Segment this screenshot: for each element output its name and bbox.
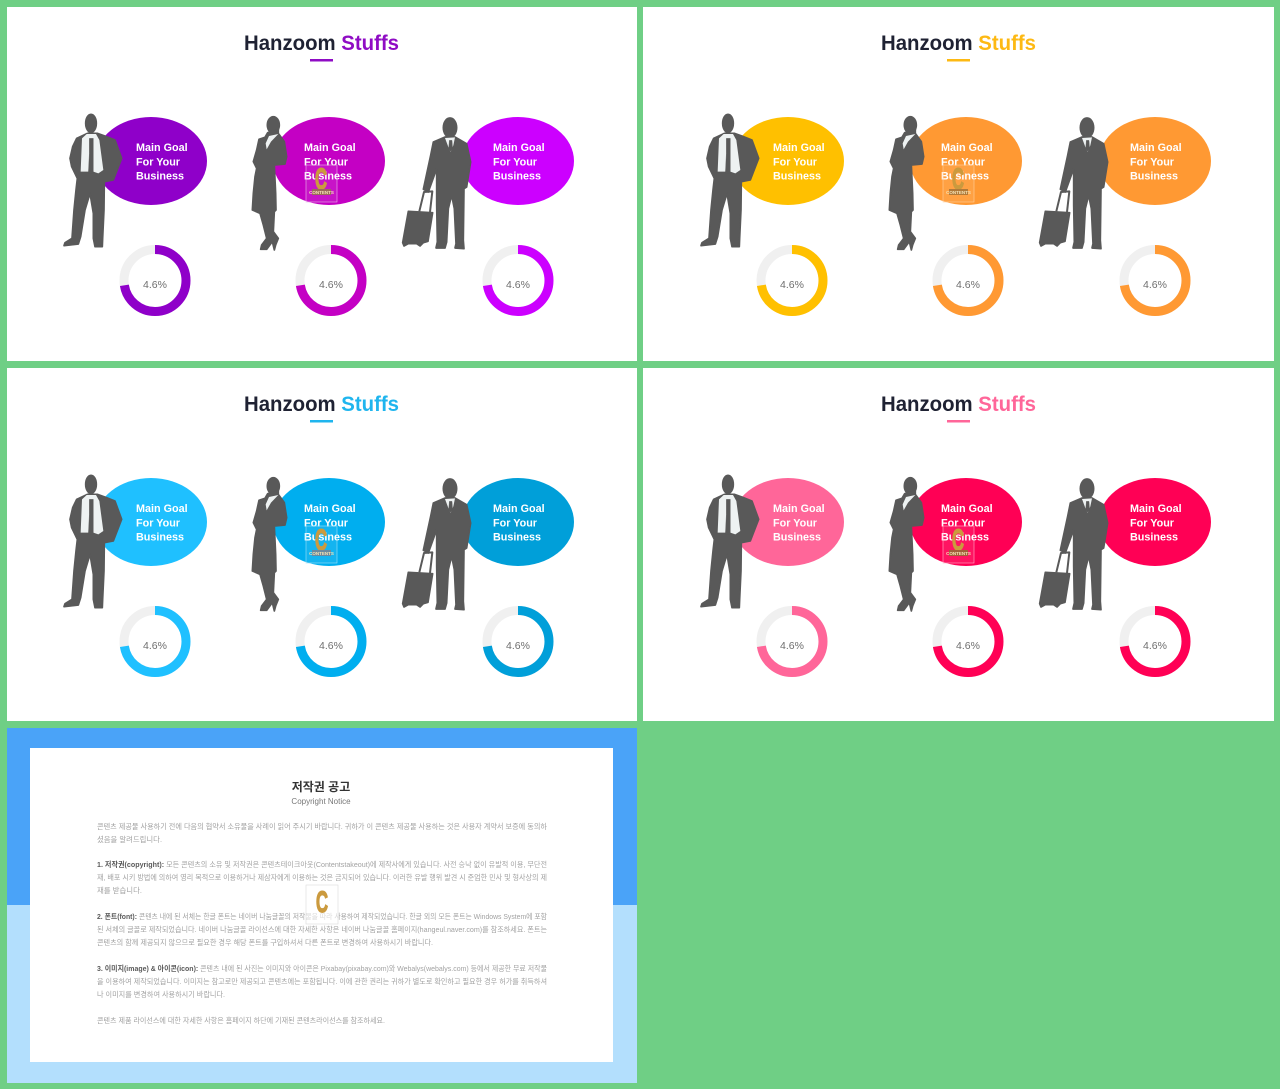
donut chart 2	[300, 250, 362, 312]
goal bubble 3	[462, 478, 574, 566]
donut chart 1	[761, 610, 823, 672]
watermark	[306, 163, 337, 202]
paragraph: image and icon	[97, 963, 547, 999]
panel: yellow and orange	[643, 7, 1274, 361]
lower light blue band	[7, 905, 637, 1083]
panel: purple	[7, 7, 637, 361]
goal bubble 2	[273, 478, 385, 566]
goal text 1: For Your	[773, 156, 818, 168]
watermark: C	[315, 163, 327, 196]
paragraph: image and icon: 나 이미지를 변경하여 사용하시기 바랍니다.	[97, 989, 225, 999]
title underline	[947, 59, 970, 62]
watermark	[943, 524, 974, 563]
goal text 1: For Your	[136, 517, 181, 529]
donut chart 3: 4.6%	[506, 279, 530, 291]
upper blue band	[7, 728, 637, 905]
goal bubble 1	[95, 117, 207, 205]
watermark: CONTENTS	[946, 190, 971, 195]
donut chart 2: 4.6%	[956, 640, 980, 652]
goal text 1: Main Goal	[773, 142, 825, 154]
title: Hanzoom Stuffs	[881, 32, 1036, 55]
goal bubble 1	[732, 117, 844, 205]
goal text 1: Business	[773, 532, 821, 544]
goal text 2: Main Goal	[941, 503, 993, 515]
goal text 2: Business	[941, 532, 989, 544]
goal text 1: Business	[136, 171, 184, 183]
paragraph: copyright: 재를 받습니다.	[97, 885, 142, 895]
donut chart 2	[937, 250, 999, 312]
goal text 3: Main Goal	[1130, 503, 1182, 515]
goal text 3: For Your	[1130, 156, 1175, 168]
watermark: C	[952, 524, 964, 557]
watermark: C	[316, 886, 328, 919]
figure: businessman	[701, 114, 759, 247]
notice title: 저작권 공고	[292, 779, 350, 794]
goal text 2: Business	[304, 171, 352, 183]
goal text 2: For Your	[304, 156, 349, 168]
donut chart 1: 4.6%	[780, 279, 804, 291]
goal text 1: Main Goal	[773, 503, 825, 515]
donut chart 1: 4.6%	[143, 640, 167, 652]
goal bubble 2	[273, 117, 385, 205]
goal text 2: For Your	[941, 156, 986, 168]
title: Hanzoom Stuffs	[881, 393, 1036, 416]
title: Hanzoom Stuffs	[244, 393, 399, 416]
notice card	[30, 748, 613, 1062]
goal text 3: Business	[1130, 532, 1178, 544]
figure: businesswoman	[252, 478, 287, 611]
goal text 2: Main Goal	[304, 503, 356, 515]
goal text 3: Business	[493, 532, 541, 544]
paragraph: font: 2. 폰트(font): 콘텐츠 내에 된 서체는 한글 폰트는 네이버 나눔글꼴의 저작물을 따라 사용하여 제작되었습니다. 한글 외의 모든 폰트는 Windows System에 포함	[97, 911, 547, 921]
figure: businessman	[701, 475, 759, 608]
panel: blue	[7, 368, 637, 721]
watermark: CONTENTS	[309, 551, 334, 556]
donut chart 2: 4.6%	[956, 279, 980, 291]
donut chart 3	[487, 250, 549, 312]
title underline	[947, 420, 970, 422]
watermark	[943, 163, 974, 202]
donut chart 1	[761, 250, 823, 312]
donut chart 2: 4.6%	[319, 279, 343, 291]
donut chart 3	[1124, 610, 1186, 672]
goal text 1: Business	[136, 532, 184, 544]
goal text 3: For Your	[1130, 517, 1175, 529]
figure: traveller with suitcase	[403, 479, 471, 610]
watermark: CONTENTS	[309, 190, 334, 195]
goal text 1: Business	[773, 171, 821, 183]
goal text 3: Main Goal	[493, 503, 545, 515]
intro paragraph: 셨음을 알려드립니다.	[97, 834, 162, 844]
title underline	[310, 420, 333, 422]
goal text 3: For Your	[493, 517, 538, 529]
goal bubble 3	[462, 117, 574, 205]
closing line: 콘텐츠 제품 라이선스에 대한 자세한 사항은 홈페이지 하단에 기재된 콘텐츠라이선스를 참조하세요.	[97, 1015, 385, 1025]
title: Hanzoom Stuffs	[244, 32, 399, 55]
paragraph: font: 콘텐츠의 함께 제공되지 않으므로 필요한 경우 해당 폰트를 구입하셔서 다른 폰트로 변경하여 사용하시기 바랍니다.	[97, 937, 433, 947]
notice subtitle: Copyright Notice	[291, 797, 351, 806]
goal text 2: For Your	[304, 517, 349, 529]
donut chart 2	[937, 610, 999, 672]
goal bubble 3	[1099, 478, 1211, 566]
paragraph: font: 된 서체의 글꼴로 제작되었습니다. 네이버 나눔글꼴 라이선스에 대한 자세한 사항은 네이버 나눔글꼴 홈페이지(hangeul.naver.com)를 참조하세요. 폰트는	[97, 924, 547, 934]
watermark: C	[315, 524, 327, 557]
goal text 2: Main Goal	[941, 142, 993, 154]
donut chart 3	[487, 610, 549, 672]
watermark	[306, 885, 338, 924]
donut chart 1: 4.6%	[143, 279, 167, 291]
goal bubble 2	[910, 478, 1022, 566]
paragraph: copyright	[97, 859, 547, 895]
donut chart 3: 4.6%	[1143, 640, 1167, 652]
goal text 2: Main Goal	[304, 142, 356, 154]
figure: businessman	[64, 114, 122, 247]
watermark	[306, 524, 337, 563]
figure: businesswoman	[889, 478, 924, 611]
goal text 3: For Your	[493, 156, 538, 168]
paragraph: font	[97, 911, 547, 947]
goal text 2: Business	[304, 532, 352, 544]
donut chart 2	[300, 610, 362, 672]
paragraph: image and icon: 3. 이미지(image) & 아이콘(icon): 콘텐츠 내에 된 사진는 이미지와 아이콘은 Pixabay(pixabay.com)와 Webalys(webalys.com) 등에서 제공한 무료 저작물	[97, 963, 547, 973]
paragraph: copyright: 재, 배포 시키 방법에 의하여 영리 목적으로 이용하거나 제삼자에게 이용하는 것은 금지되어 있습니다. 이러한 유발 행위 발견 시 준엄한 민사 및 형사상의 제	[97, 872, 547, 882]
goal bubble 1	[95, 478, 207, 566]
donut chart 3	[1124, 250, 1186, 312]
goal bubble 3	[1099, 117, 1211, 205]
goal bubble 1	[732, 478, 844, 566]
figure: traveller with suitcase	[1040, 479, 1108, 610]
donut chart 1	[124, 250, 186, 312]
title underline	[310, 59, 333, 62]
goal text 3: Business	[1130, 171, 1178, 183]
goal text 3: Main Goal	[493, 142, 545, 154]
goal text 3: Main Goal	[1130, 142, 1182, 154]
goal text 2: For Your	[941, 517, 986, 529]
paragraph: copyright: 1. 저작권(copyright): 모든 콘텐츠의 소유 및 저작권은 콘텐츠테이크아웃(Contentstakeout)에 제작사에게 있습니다. 사전 승낙 없이 유발적 이용, 무단전	[97, 859, 547, 869]
figure: traveller with suitcase	[1040, 118, 1108, 249]
paragraph: image and icon: 을 이용하여 제작되었습니다. 이미지는 참고로만 제공되고 콘텐츠에는 포함됩니다. 이에 관한 권리는 귀하가 별도로 확인하고 필요한 경우 허가를 취득하셔	[97, 976, 547, 986]
goal text 1: Main Goal	[136, 142, 188, 154]
intro paragraph	[97, 821, 547, 844]
intro paragraph: 콘텐츠 제공물 사용하기 전에 다음의 협약서 소유물을 사례이 읽어 주시기 바랍니다. 귀하가 이 콘텐츠 제공물 사용하는 것은 사용자 계약서 보증에 동의하	[97, 821, 547, 831]
figure: businesswoman	[252, 117, 287, 250]
donut chart 1	[124, 610, 186, 672]
figure: businesswoman	[889, 117, 924, 250]
donut chart 3: 4.6%	[1143, 279, 1167, 291]
donut chart 1: 4.6%	[780, 640, 804, 652]
goal text 1: Main Goal	[136, 503, 188, 515]
goal text 1: For Your	[773, 517, 818, 529]
goal text 2: Business	[941, 171, 989, 183]
donut chart 3: 4.6%	[506, 640, 530, 652]
watermark: CONTENTS	[946, 551, 971, 556]
panel: copyright notice	[7, 728, 637, 1083]
panel: pink	[643, 368, 1274, 721]
goal text 3: Business	[493, 171, 541, 183]
watermark: C	[952, 163, 964, 196]
donut chart 2: 4.6%	[319, 640, 343, 652]
goal text 1: For Your	[136, 156, 181, 168]
figure: traveller with suitcase	[403, 118, 471, 249]
goal bubble 2	[910, 117, 1022, 205]
figure: businessman	[64, 475, 122, 608]
